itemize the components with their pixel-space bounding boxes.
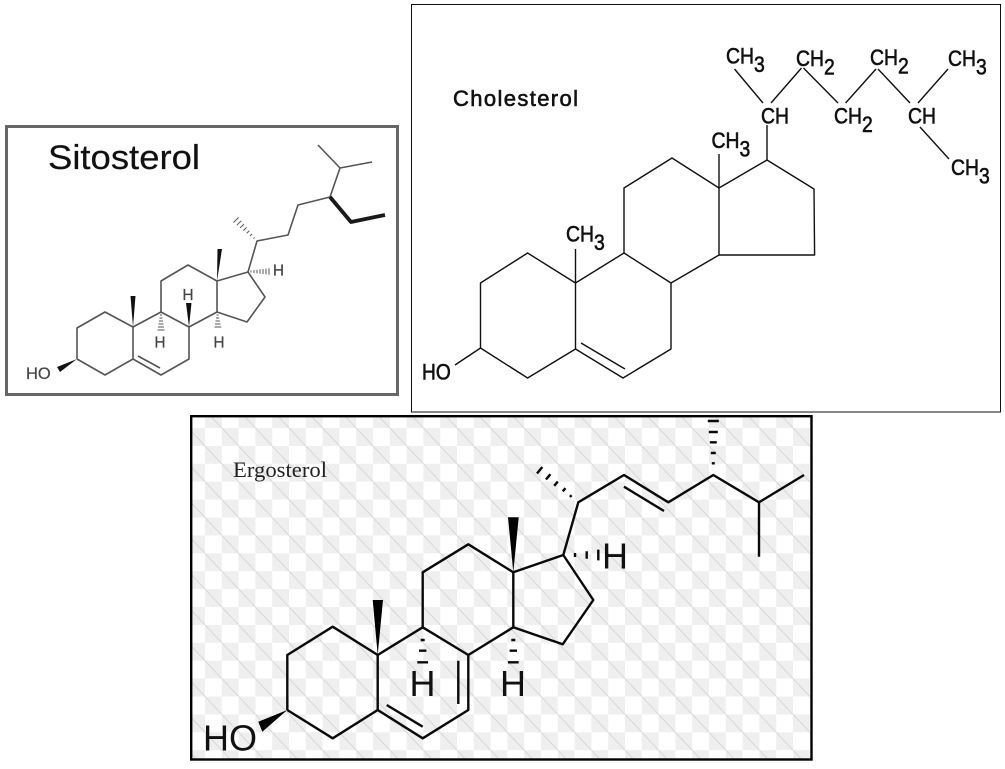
sitosterol skeletal structure bbox=[77, 145, 385, 375]
sitosterol atom labels: H bbox=[213, 334, 225, 352]
panel: sitosterol bbox=[6, 126, 398, 394]
cholesterol atom labels: CH bbox=[566, 222, 594, 247]
cholesterol skeletal structure bbox=[455, 68, 949, 378]
cholesterol atom labels: CH bbox=[796, 47, 824, 71]
ergosterol skeletal structure bbox=[287, 421, 804, 738]
heading: cholesterol: Cholesterol bbox=[453, 86, 578, 111]
cholesterol atom labels: 2 bbox=[824, 55, 835, 80]
cholesterol atom labels: 3 bbox=[979, 164, 990, 189]
heading: ergosterol: Ergosterol bbox=[233, 457, 327, 482]
cholesterol atom labels: 2 bbox=[862, 113, 873, 137]
sitosterol atom labels: HO bbox=[26, 365, 51, 383]
cholesterol panel frame bbox=[412, 4, 1000, 412]
ergosterol atom labels bbox=[203, 535, 628, 758]
cholesterol atom labels: 3 bbox=[739, 137, 750, 162]
cholesterol atom labels: CH bbox=[712, 129, 739, 153]
cholesterol atom labels bbox=[422, 44, 990, 385]
cholesterol atom labels: HO bbox=[422, 360, 451, 385]
cholesterol atom labels: CH bbox=[951, 156, 979, 180]
ergosterol atom labels: H bbox=[500, 663, 526, 704]
ergosterol wedge bonds bbox=[258, 517, 519, 732]
ergosterol atom labels: HO bbox=[203, 718, 257, 758]
cholesterol atom labels: CH bbox=[908, 104, 936, 129]
cholesterol atom labels: CH bbox=[761, 104, 789, 129]
cholesterol atom labels: 3 bbox=[754, 53, 765, 77]
sitosterol panel frame bbox=[6, 126, 398, 394]
sitosterol atom labels: H bbox=[154, 334, 166, 352]
cholesterol atom labels: CH bbox=[870, 46, 898, 70]
sitosterol atom labels bbox=[26, 262, 284, 383]
cholesterol atom labels: 3 bbox=[594, 231, 605, 255]
cholesterol atom labels: CH bbox=[834, 104, 862, 129]
sitosterol atom labels: H bbox=[182, 287, 194, 304]
ergosterol atom labels: H bbox=[410, 663, 436, 704]
ergosterol panel checkered background and frame bbox=[191, 416, 811, 760]
heading: sitosterol: Sitosterol bbox=[48, 139, 200, 177]
cholesterol atom labels: CH bbox=[726, 44, 754, 69]
panel: ergosterol bbox=[191, 416, 811, 760]
cholesterol atom labels: 2 bbox=[898, 54, 909, 79]
sitosterol wedge bonds bbox=[57, 249, 222, 372]
ergosterol atom labels: H bbox=[602, 535, 628, 576]
cholesterol atom labels: CH bbox=[948, 47, 976, 71]
panel: cholesterol bbox=[412, 4, 1000, 412]
sitosterol atom labels: H bbox=[273, 262, 284, 280]
cholesterol atom labels: 3 bbox=[976, 55, 987, 80]
